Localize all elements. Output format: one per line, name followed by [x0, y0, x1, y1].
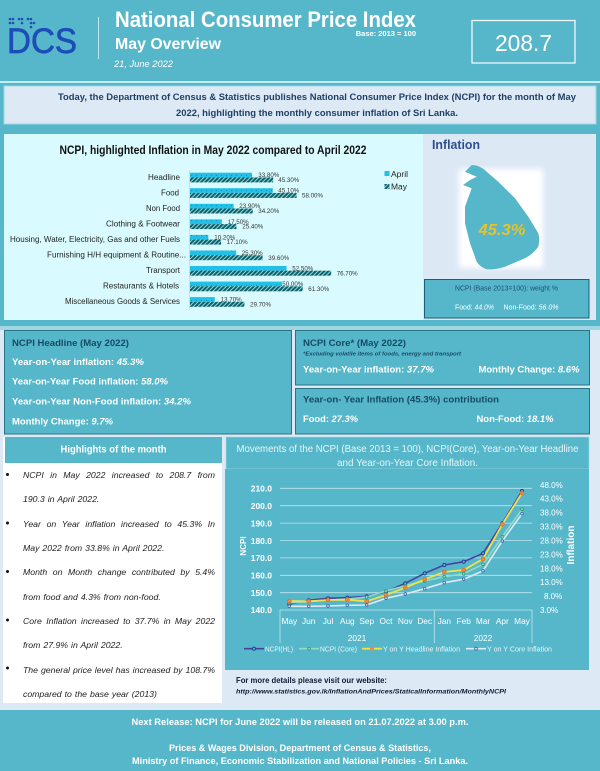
issuing office: Prices & Wages Division, Department of Census & Statistics, — [169, 743, 431, 754]
month labels: Jun — [302, 616, 316, 626]
panel: inflation contribution: Food: 27.3% — [303, 414, 359, 425]
month labels — [281, 616, 531, 626]
year labels: 2022 — [474, 633, 493, 643]
left axis labels: 180.0 — [251, 536, 272, 546]
month labels: Jan — [438, 616, 451, 626]
month labels: Jul — [323, 616, 333, 626]
grid lines and axis — [280, 488, 532, 643]
panel: inflation contribution: Non-Food: 18.1% — [476, 414, 554, 425]
month labels: Aug — [340, 616, 355, 626]
panel: NCPI core: *Excluding volatile items of foods, energy and transport — [303, 352, 462, 358]
left axis labels: 140.0 — [251, 605, 272, 615]
website note: http://www.statistics.gov.lk/InflationAndPrices/StaticalInformation/MonthlyNCPI — [236, 688, 506, 696]
year labels: 2021 — [348, 633, 367, 643]
panel: NCPI headline: Year-on-Year Food inflation: 58.0% — [12, 376, 169, 388]
bar value labels: 17.10% — [227, 239, 248, 246]
highlights heading — [5, 437, 222, 463]
bar value labels: 34.20% — [258, 208, 280, 215]
panel: NCPI core: NCPI Core* (May 2022) — [303, 338, 406, 349]
highlights text — [23, 470, 215, 699]
bar value labels: 25.40% — [242, 224, 264, 231]
line chart legend — [244, 646, 552, 654]
bar value labels: 50.00% — [282, 281, 304, 288]
panel: NCPI core: Year-on-Year inflation: 37.7% — [303, 364, 435, 376]
bar value labels: 10.20% — [214, 234, 236, 241]
highlights heading: Highlights of the month — [60, 444, 166, 456]
panel: highlights — [3, 437, 222, 703]
right axis labels — [540, 481, 563, 615]
month labels: Feb — [457, 616, 471, 626]
bar value labels: 17.50% — [228, 219, 249, 226]
right axis labels: 8.0% — [544, 592, 562, 601]
header band — [0, 0, 600, 83]
bar value labels: 45.10% — [278, 188, 300, 194]
next release note: Next Release: NCPI for June 2022 will be released on 21.07.2022 at 3.00 p.m. — [132, 717, 468, 728]
panel: line chart — [225, 437, 596, 705]
line chart title: and Year-on-Year Core Inflation. — [337, 458, 478, 469]
month labels: May — [514, 616, 531, 626]
line chart title — [226, 437, 589, 469]
right axis labels: 33.0% — [540, 523, 563, 532]
footer — [0, 710, 600, 771]
line chart legend: Y on Y Headline Inflation — [383, 646, 460, 654]
icon: DCS logo: DCS — [7, 22, 77, 61]
panel: NCPI headline: NCPI Headline (May 2022) — [12, 338, 129, 349]
weights box: NCPI (Base 2013=100): weight % — [455, 286, 558, 292]
weights box: Food: 44.0% — [455, 304, 494, 312]
panel: inflation contribution: Year-on- Year Inflation (45.3%) contribution — [303, 394, 499, 406]
left axis labels — [251, 484, 272, 615]
bar value labels: 29.70% — [250, 301, 271, 308]
weights box: Non-Food: 56.0% — [504, 304, 558, 312]
panel: NCPI headline: Year-on-Year Non-Food inflation: 34.2% — [12, 396, 192, 408]
bar value labels: 13.70% — [221, 296, 242, 304]
lower background panel — [0, 326, 600, 710]
category labels: Housing, Water, Electricity, Gas and other Fuels — [10, 235, 180, 244]
weights box — [424, 280, 589, 318]
line chart legend: NCPI (Core) — [320, 646, 357, 654]
month labels: Sep — [359, 616, 374, 626]
left axis labels: 190.0 — [251, 518, 272, 528]
bar chart legend: April — [391, 170, 408, 179]
panel: NCPI core: Monthly Change: 8.6% — [478, 364, 580, 376]
category labels: Miscellaneous Goods & Services — [65, 297, 180, 306]
category labels: Headline — [148, 173, 181, 182]
right axis labels: 48.0% — [540, 481, 563, 490]
category labels: Clothing & Footwear — [106, 220, 180, 228]
left axis labels: 200.0 — [251, 501, 272, 511]
series: NCPI core — [289, 509, 522, 603]
index value box: 208.7 — [495, 30, 552, 56]
bar chart legend: May — [391, 182, 407, 192]
bullets — [6, 473, 9, 670]
highlights text: NCPI in May 2022 increased to 208.7 from — [23, 470, 215, 480]
highlights text: Month on Month change contributed by 5.4% — [23, 567, 215, 577]
category labels: Restaurants & Hotels — [103, 282, 179, 290]
panel: NCPI headline — [4, 330, 292, 434]
category labels: Food — [161, 188, 179, 198]
title: National Consumer Price Index — [115, 7, 417, 32]
bar value labels: 45.30% — [278, 177, 300, 184]
year labels — [348, 633, 493, 643]
series: Y on Y core — [289, 514, 522, 606]
series: Y on Y headline — [289, 493, 522, 601]
index value box — [472, 20, 575, 63]
bar value labels: 25.30% — [242, 250, 263, 257]
bar chart title: NCPI, highlighted Inflation in May 2022 compared to April 2022 — [60, 145, 366, 157]
line chart legend: NCPI(HL) — [265, 646, 293, 654]
date: 21, June 2022 — [113, 59, 173, 69]
right axis title: Inflation — [566, 526, 577, 564]
bar value labels: 39.60% — [268, 255, 290, 262]
bar value labels: 61.30% — [308, 286, 330, 293]
subtitle: May Overview — [115, 36, 222, 53]
panel: bar chart — [4, 134, 423, 320]
bar chart legend — [384, 170, 408, 192]
right axis labels: 43.0% — [540, 495, 563, 504]
highlights text: from 27.9% in April 2022. — [23, 640, 123, 650]
highlights text: compared to the base year (2013) — [23, 689, 157, 699]
highlights text: Core Inflation increased to 37.7% in May 2022 — [23, 616, 215, 626]
bar value labels: 33.80% — [258, 172, 280, 179]
left axis labels: 150.0 — [251, 588, 272, 598]
category labels: Furnishing H/H equipment & Routine... — [47, 250, 186, 260]
left axis labels: 210.0 — [251, 484, 272, 494]
highlights text: The general price level has increased by 108.7% — [23, 665, 215, 675]
month labels: Nov — [398, 616, 414, 626]
inflation heading: Inflation — [432, 138, 480, 152]
bars — [189, 170, 331, 310]
intro text panel: Today, the Department of Census & Statistics publishes National Consumer Price Index (NCPI) for the month of May — [58, 91, 577, 102]
right axis labels: 23.0% — [540, 550, 563, 559]
bar value labels: 23.90% — [239, 203, 261, 210]
month labels: Mar — [476, 616, 490, 626]
intro text panel — [4, 86, 596, 124]
bar value labels: 76.70% — [337, 270, 358, 277]
category labels — [10, 173, 186, 306]
highlights text: from food and 4.3% from non-food. — [23, 592, 161, 602]
right axis labels: 28.0% — [540, 536, 563, 545]
panel: inflation contribution — [296, 388, 590, 434]
map value: 45.3% — [477, 222, 526, 239]
line chart legend: Y on Y Core Inflation — [487, 646, 552, 654]
line chart title: Movements of the NCPI (Base 2013 = 100), NCPI(Core), Year-on-Year Headline — [236, 444, 579, 455]
month labels: Dec — [417, 616, 432, 626]
intro text panel: 2022, highlighting the monthly consumer inflation of Sri Lanka. — [176, 107, 458, 118]
panel: NCPI headline: Monthly Change: 9.7% — [12, 416, 114, 428]
highlights text: 190.3 in April 2022. — [23, 494, 99, 504]
map of Sri Lanka — [459, 165, 543, 269]
right axis labels: 13.0% — [540, 578, 563, 587]
right axis labels: 3.0% — [540, 606, 558, 615]
left axis title: NCPI — [239, 536, 248, 556]
bar value labels: 58.00% — [302, 192, 323, 200]
category labels: Non Food — [146, 204, 180, 213]
month labels: Oct — [380, 616, 393, 626]
panel: NCPI core — [296, 330, 590, 385]
base year note: Base: 2013 = 100 — [356, 29, 416, 38]
website note — [236, 676, 506, 696]
highlights text: Year on Year inflation increased to 45.3% In — [23, 519, 215, 529]
right axis labels: 18.0% — [540, 564, 563, 573]
bar value labels — [214, 172, 358, 308]
website note: For more details please visit our website: — [236, 676, 387, 685]
series: NCPI HL — [289, 491, 522, 604]
panel: inflation map — [423, 134, 596, 320]
category labels: Transport — [146, 266, 181, 275]
month labels: May — [281, 616, 298, 626]
right axis labels: 38.0% — [540, 509, 563, 518]
footer: Ministry of Finance, Economic Stabilization and National Policies - Sri Lanka. — [132, 756, 468, 767]
highlights text: May 2022 from 33.8% in April 2022. — [23, 543, 164, 553]
month labels: Apr — [496, 616, 509, 626]
panel: NCPI headline: Year-on-Year inflation: 45.3% — [12, 357, 145, 368]
bar value labels: 52.50% — [292, 265, 314, 272]
left axis labels: 170.0 — [251, 553, 272, 563]
left axis labels: 160.0 — [251, 570, 272, 580]
